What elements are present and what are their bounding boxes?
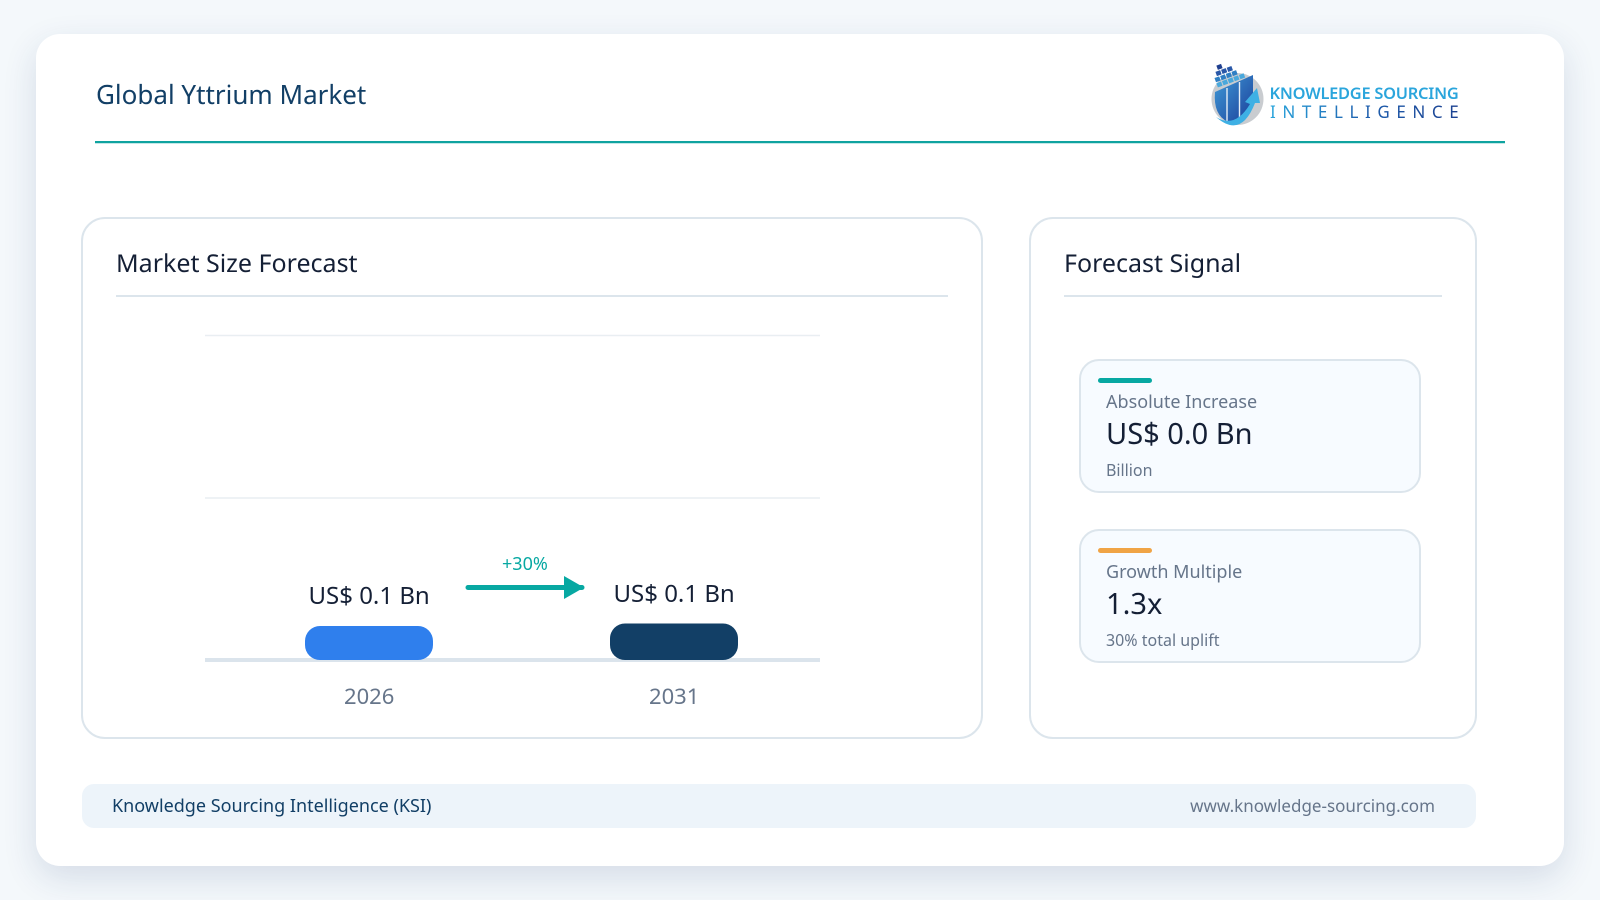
accent bar teal xyxy=(1098,378,1152,383)
label: growth multiple: Growth Multiple xyxy=(1106,560,1242,584)
note: total uplift: 30% total uplift xyxy=(1106,629,1220,651)
panel: market size forecast xyxy=(81,217,983,739)
heading: market size forecast: Market Size Forecast xyxy=(116,246,358,280)
footer bar xyxy=(82,784,1476,828)
panel: forecast signal xyxy=(1029,217,1477,739)
value: growth multiple: 1.3x xyxy=(1106,584,1162,623)
arrow xyxy=(468,576,584,599)
title: Global Yttrium Market xyxy=(96,76,366,112)
footer right text: www.knowledge-sourcing.com xyxy=(1190,794,1435,817)
label: 2026: 2026 xyxy=(344,681,394,711)
note: billion: Billion xyxy=(1106,459,1152,481)
label: 2031: 2031 xyxy=(649,681,699,711)
footer left text: Knowledge Sourcing Intelligence (KSI) xyxy=(112,794,431,818)
label: 2031 value: US$ 0.1 Bn xyxy=(614,577,735,610)
label: absolute increase: Absolute Increase xyxy=(1106,390,1257,414)
card: growth multiple xyxy=(1079,529,1421,663)
logo xyxy=(1212,64,1465,126)
card: absolute increase xyxy=(1079,359,1421,493)
heading: forecast signal: Forecast Signal xyxy=(1064,246,1241,280)
logo: KNOWLEDGE SOURCING xyxy=(1270,81,1458,104)
label: 2026 value: US$ 0.1 Bn xyxy=(308,579,430,612)
value: absolute increase: US$ 0.0 Bn xyxy=(1106,414,1253,453)
panel rule xyxy=(1064,295,1442,297)
logo: INTELLIGENCE xyxy=(1270,100,1465,123)
bar 2031 xyxy=(610,624,738,660)
header rule xyxy=(95,141,1505,143)
bar chart xyxy=(205,334,820,662)
label: growth percent: +30% xyxy=(502,552,548,576)
panel rule xyxy=(116,295,948,297)
baseline xyxy=(205,658,820,662)
accent bar orange xyxy=(1098,548,1152,553)
bar 2026 xyxy=(305,626,433,660)
